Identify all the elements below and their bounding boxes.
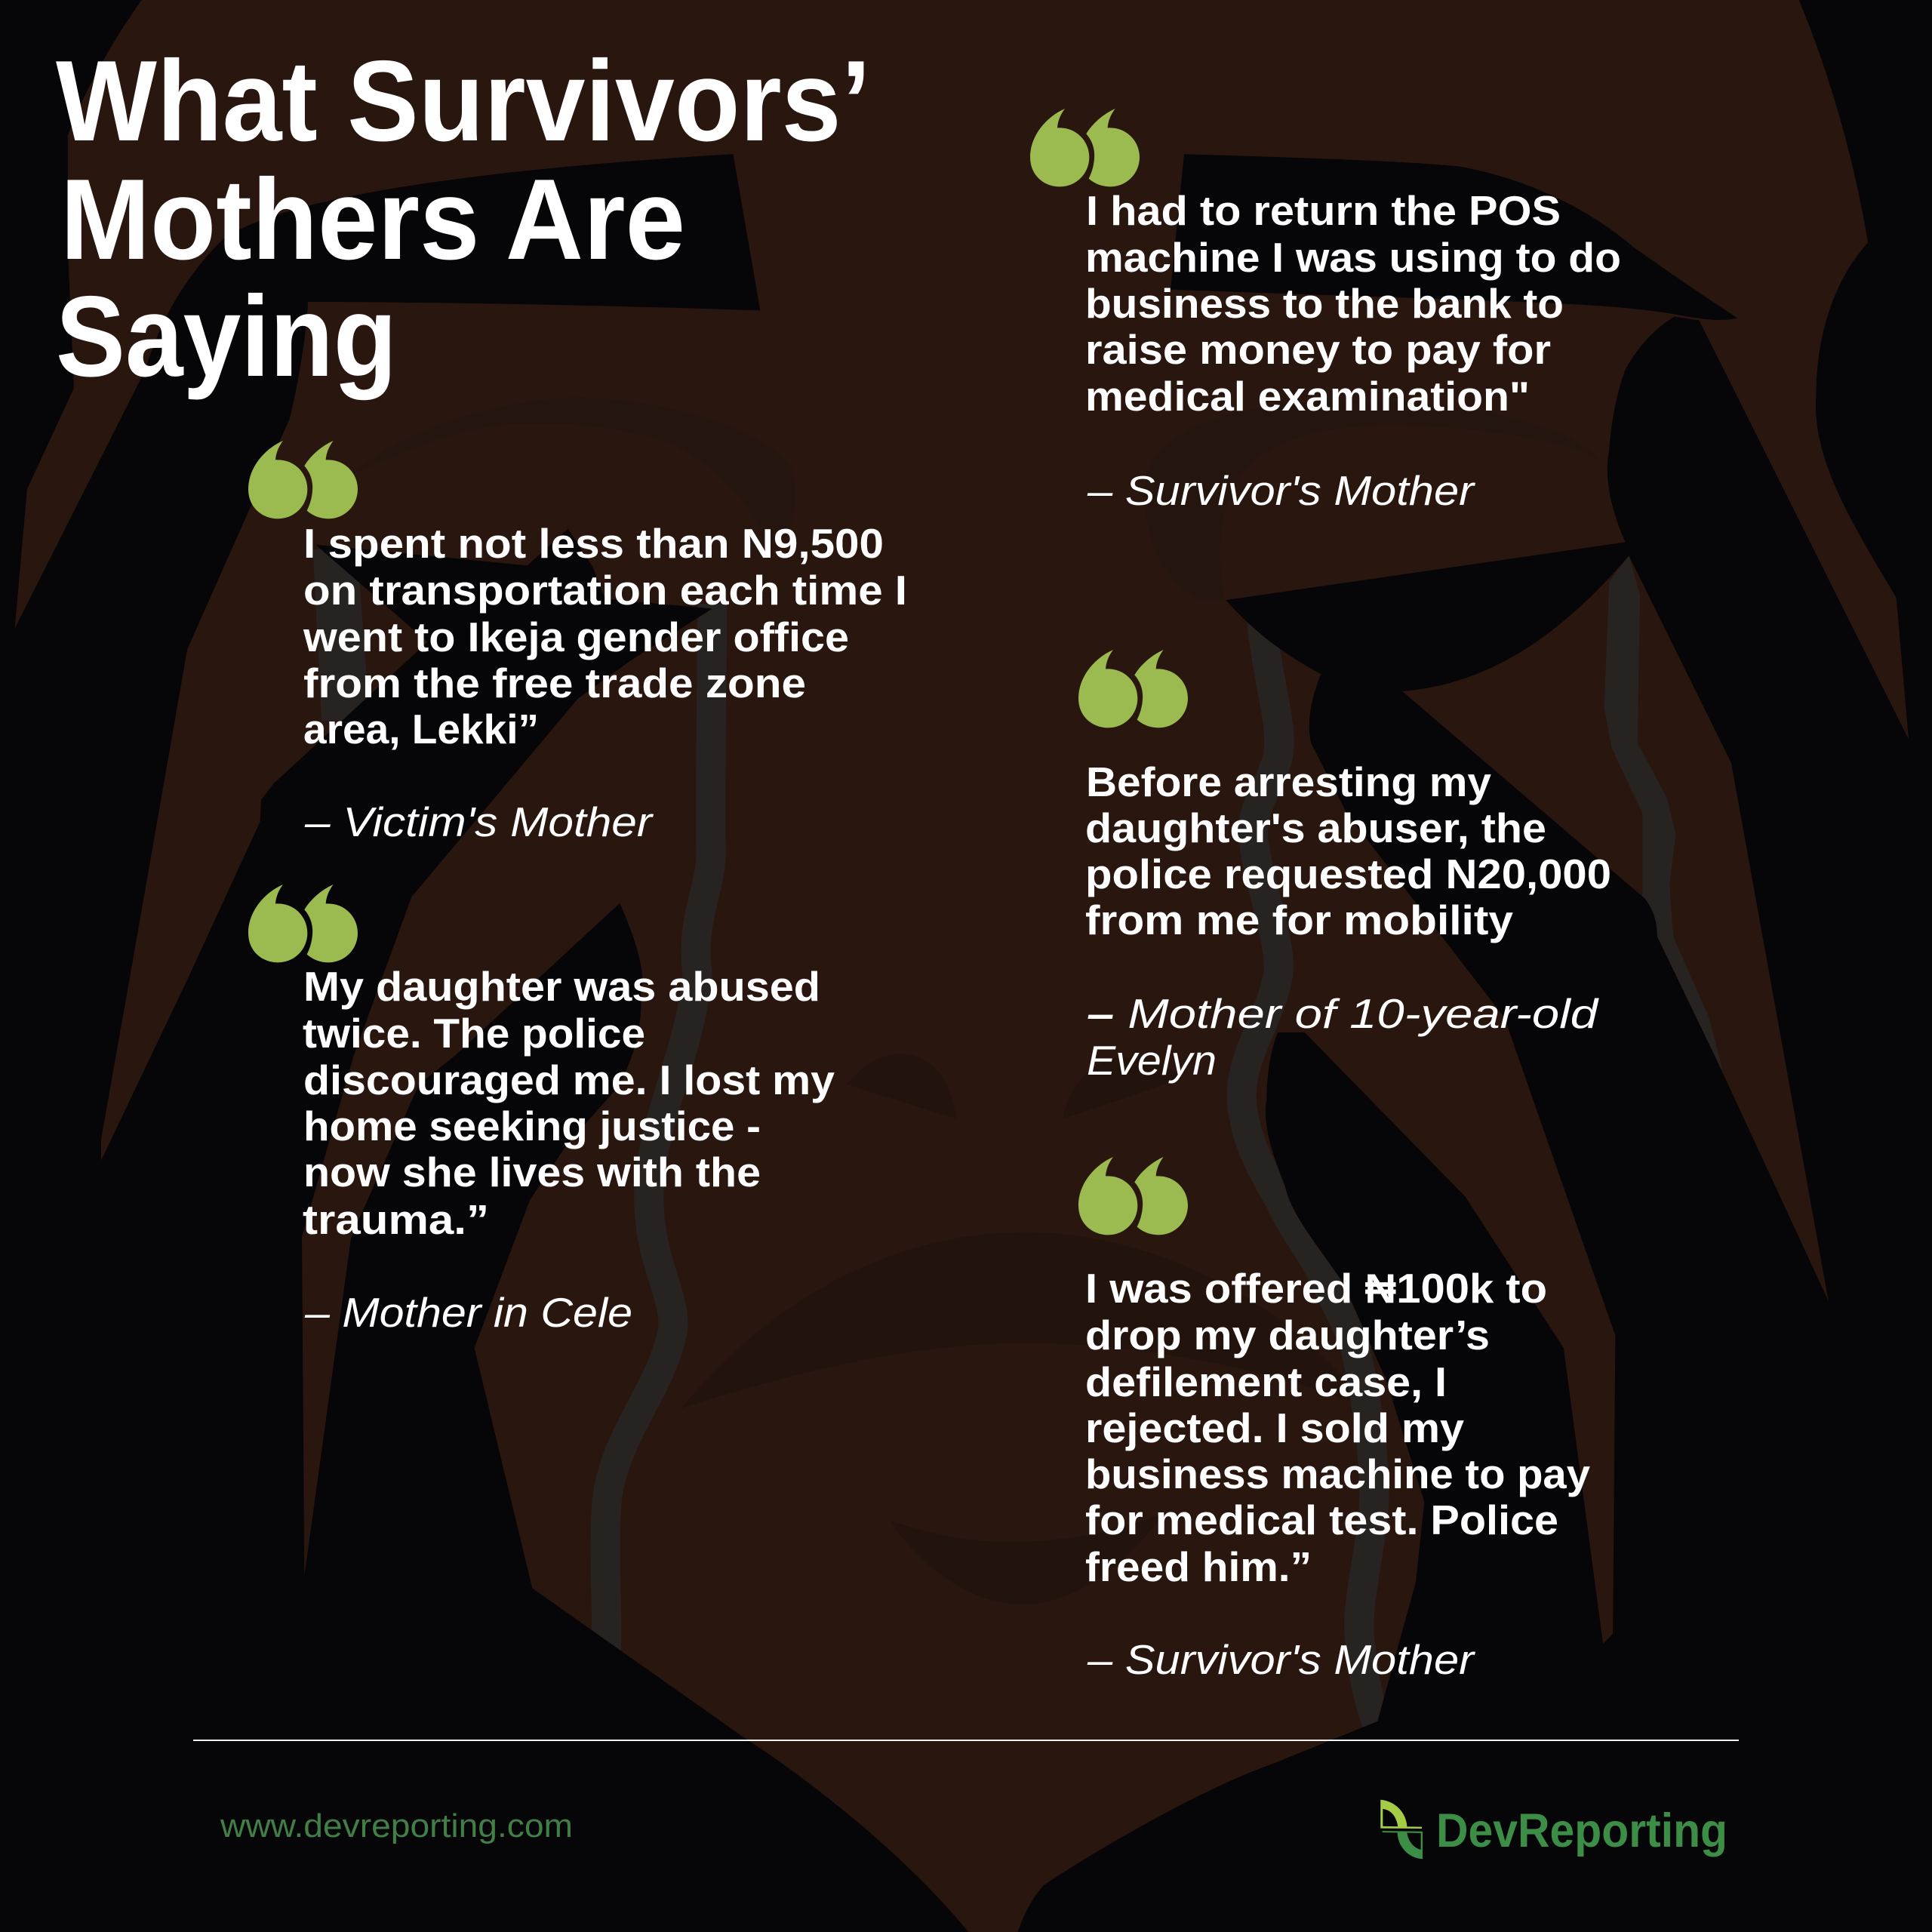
quote 3: survivor's mother, POS machine: raise money to pay for bbox=[1085, 326, 1551, 373]
icon: quotation mark bbox=[1078, 1157, 1188, 1235]
logo: DevReporting: DevReporting bbox=[1436, 1804, 1727, 1857]
quote 4: mother of Evelyn: Before arresting my bbox=[1086, 758, 1491, 805]
quote 4: mother of Evelyn bbox=[1078, 650, 1611, 1084]
quote 1: victim's mother: from the free trade zone bbox=[303, 660, 806, 706]
quote 1: victim's mother: – Victim's Mother bbox=[304, 798, 654, 845]
quote 5: survivor's mother, N100k offer: business machine to pay bbox=[1085, 1451, 1590, 1497]
quote 4: mother of Evelyn: police requested N20,000 bbox=[1085, 851, 1611, 897]
quote 3: survivor's mother, POS machine bbox=[1030, 109, 1621, 514]
quote 5: survivor's mother, N100k offer: defilement case, I bbox=[1085, 1358, 1447, 1405]
quote 5: survivor's mother, N100k offer: for medical test. Police bbox=[1085, 1497, 1558, 1543]
icon: quotation mark bbox=[248, 441, 358, 518]
eye shading bbox=[351, 398, 1601, 600]
title: Mothers Are bbox=[60, 155, 685, 284]
quote 4: mother of Evelyn: from me for mobility bbox=[1085, 897, 1513, 943]
tear on right cheek bbox=[1604, 555, 1724, 1075]
quote 3: survivor's mother, POS machine: I had to return the POS bbox=[1086, 187, 1561, 234]
quote 2: mother in Cele: – Mother in Cele bbox=[304, 1289, 632, 1336]
quote 2: mother in Cele: home seeking justice - bbox=[303, 1103, 761, 1149]
quote 4: mother of Evelyn: daughter's abuser, the bbox=[1085, 804, 1546, 851]
quote 2: mother in Cele: twice. The police bbox=[303, 1010, 645, 1057]
quote 4: mother of Evelyn: Evelyn bbox=[1087, 1037, 1217, 1084]
brown strand on right bbox=[1402, 555, 1829, 1301]
right hair and shoulder bbox=[1018, 0, 1932, 1932]
title: What Survivors’ bbox=[56, 37, 871, 165]
tears under hair bbox=[605, 604, 1377, 1725]
quote 5: survivor's mother, N100k offer: I was offered ₦100k to bbox=[1085, 1265, 1547, 1312]
icon: logo mark bbox=[1380, 1800, 1423, 1859]
quote 3: survivor's mother, POS machine: medical examination" bbox=[1085, 373, 1530, 420]
quote 3: survivor's mother, POS machine: machine I was using to do bbox=[1085, 234, 1621, 281]
quote 4: mother of Evelyn: – Mother of 10-year-old bbox=[1087, 990, 1600, 1037]
quote 1: victim's mother: on transportation each time I bbox=[303, 567, 907, 614]
left hair and shoulder bbox=[0, 0, 968, 1932]
quote 2: mother in Cele: discouraged me. I lost my bbox=[303, 1057, 835, 1103]
quote 5: survivor's mother, N100k offer: freed him.” bbox=[1085, 1543, 1312, 1590]
quote 3: survivor's mother, POS machine: business to the bank to bbox=[1085, 280, 1564, 327]
quote 3: survivor's mother, POS machine: – Survivor's Mother bbox=[1087, 467, 1476, 514]
quote 2: mother in Cele bbox=[248, 884, 835, 1336]
quote 2: mother in Cele: now she lives with the bbox=[303, 1149, 761, 1195]
quote 1: victim's mother: I spent not less than N9,500 bbox=[303, 520, 884, 567]
quote 5: survivor's mother, N100k offer: – Survivor's Mother bbox=[1087, 1636, 1476, 1683]
quote 5: survivor's mother, N100k offer: drop my daughter’s bbox=[1085, 1312, 1490, 1358]
icon: quotation mark bbox=[248, 884, 358, 962]
title: Saying bbox=[56, 272, 397, 401]
website url: www.devreporting.com bbox=[220, 1807, 573, 1844]
nose and lip shading bbox=[681, 1054, 1369, 1604]
title bbox=[56, 37, 871, 401]
right eyebrow bbox=[1171, 154, 1737, 320]
quote 5: survivor's mother, N100k offer bbox=[1078, 1157, 1590, 1683]
quote 1: victim's mother bbox=[248, 441, 907, 845]
quote 2: mother in Cele: trauma.” bbox=[303, 1196, 489, 1243]
icon: quotation mark bbox=[1078, 650, 1188, 728]
quote 1: victim's mother: area, Lekki” bbox=[303, 706, 539, 752]
icon: quotation mark bbox=[1030, 109, 1140, 186]
quote 5: survivor's mother, N100k offer: rejected. I sold my bbox=[1085, 1404, 1464, 1451]
quote 2: mother in Cele: My daughter was abused bbox=[303, 963, 820, 1010]
quote 1: victim's mother: went to Ikeja gender office bbox=[303, 614, 849, 660]
